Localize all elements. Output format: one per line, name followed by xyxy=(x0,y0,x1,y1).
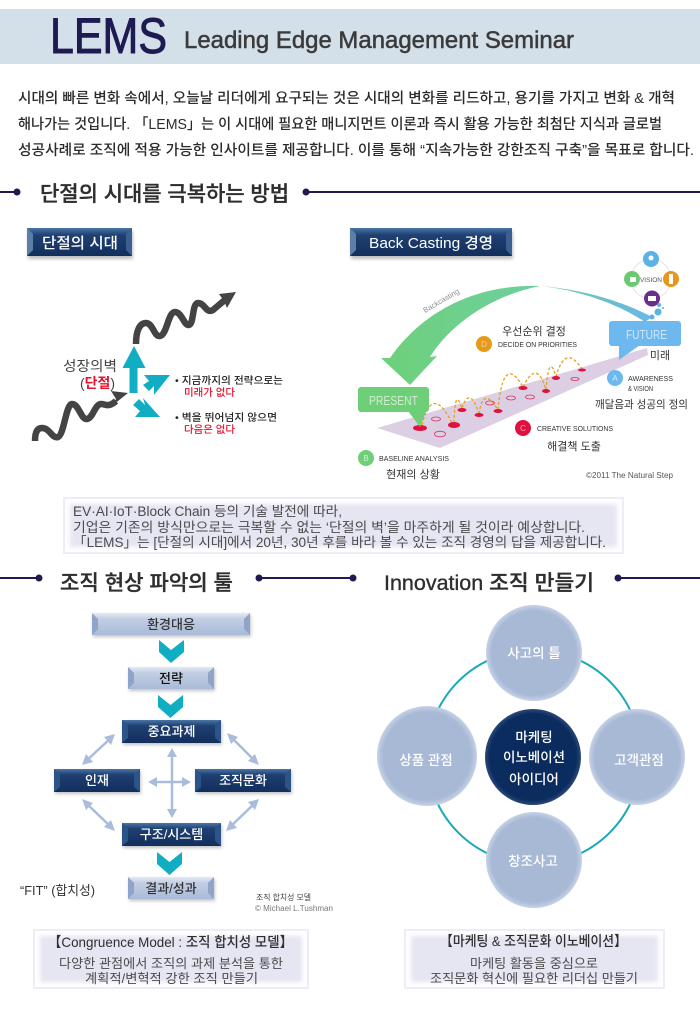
subtitle: Leading Edge Management Seminar xyxy=(184,27,574,54)
circle: 고객관점 xyxy=(589,709,685,805)
right-up arrow xyxy=(143,375,170,395)
road strip xyxy=(377,348,648,448)
step A xyxy=(595,370,688,411)
title: LEMS: LEMS xyxy=(50,8,167,64)
bullet 1 xyxy=(175,374,283,399)
step A: A xyxy=(612,374,618,383)
callout: discontinuity note xyxy=(64,498,623,553)
callout: congruence model xyxy=(34,930,308,988)
backcasting arc arrow xyxy=(381,286,652,385)
callout: PRESENT: PRESENT xyxy=(369,393,418,408)
button: 단절의 시대: 단절의 시대 xyxy=(42,235,118,252)
step A: AWARENESS xyxy=(628,376,673,383)
button: 단절의 시대 xyxy=(27,228,133,259)
callout: congruence model: 【Congruence Model : 조직 합치성 모델】 xyxy=(48,934,293,950)
box: 조직문화 xyxy=(195,769,292,794)
box: 환경대응 xyxy=(92,613,251,637)
bullet 2: • 벽을 뛰어넘지 않으면 xyxy=(175,412,277,424)
label: Backcasting: Backcasting xyxy=(422,287,461,315)
step A: & VISION xyxy=(628,386,653,393)
callout: marketing and culture: 조직문화 혁신에 필요한 리더십 만들기 xyxy=(430,971,638,986)
button: Back Casting 경영: Back Casting 경영 xyxy=(369,235,493,252)
double arrows xyxy=(82,733,259,831)
callout: congruence model: 계획적/변혁적 강한 조직 만들기 xyxy=(85,971,258,986)
circle: 상품 관점: 상품 관점 xyxy=(399,753,453,768)
callout: marketing and culture: 마케팅 활동을 중심으로 xyxy=(470,956,598,971)
header band xyxy=(0,8,700,64)
hollow stepping points xyxy=(432,378,579,437)
upper wave arrow xyxy=(136,292,236,344)
box: 조직문화: 조직문화 xyxy=(219,773,267,788)
copyright: ©2011 The Natural Step xyxy=(586,471,674,480)
bullet 1: 미래가 없다 xyxy=(184,386,235,399)
model credit xyxy=(255,892,333,913)
box: 환경대응: 환경대응 xyxy=(147,617,195,632)
heading: overcoming the age of discontinuity xyxy=(0,183,700,206)
step B xyxy=(358,450,449,481)
step B: BASELINE ANALYSIS xyxy=(379,456,449,463)
intro text block: 성공사례로 조직에 적용 가능한 인사이트를 제공합니다. 이를 통해 “지속가능한 강한조직 구축”을 목표로 합니다. xyxy=(18,142,694,159)
chevron 3 xyxy=(157,852,182,875)
bullet 1: • 지금까지의 전략으로는 xyxy=(175,374,283,387)
center circle: 이노베이션 xyxy=(503,750,565,765)
model credit: © Michael L.Tushman xyxy=(255,904,333,913)
heading: organization diagnosis tool: 조직 현상 파악의 툴 xyxy=(60,572,233,595)
callout: PRESENT xyxy=(358,387,429,427)
box: 인재 xyxy=(54,769,141,794)
lower wave arrow xyxy=(35,391,128,441)
step D: D xyxy=(481,340,487,349)
step C xyxy=(515,420,613,453)
heading: overcoming the age of discontinuity: 단절의 시대를 극복하는 방법 xyxy=(40,183,289,206)
circle: 고객관점: 고객관점 xyxy=(614,753,664,768)
hop path xyxy=(422,358,582,425)
callout: discontinuity note: 「LEMS」는 [단절의 시대]에서 20년, 30년 후를 바라 볼 수 있는 조직 경영의 답을 제공합니다. xyxy=(73,535,606,550)
vision cluster: VISION xyxy=(640,277,662,284)
heading: organization diagnosis tool xyxy=(0,572,356,595)
step C: C xyxy=(520,424,526,433)
circle: 창조사고 xyxy=(486,812,582,908)
up arrow xyxy=(122,346,146,393)
vision cluster xyxy=(624,251,679,320)
intro text block xyxy=(18,90,694,159)
box: 전략 xyxy=(128,667,215,691)
step C: 해결책 도출 xyxy=(547,439,601,453)
label: wall of growth: 성장의벽 xyxy=(63,358,117,374)
step A: 깨달음과 성공의 정의 xyxy=(595,398,688,411)
model credit: 조직 합치성 모델 xyxy=(256,892,311,902)
box: 구조/시스템 xyxy=(122,823,222,848)
box: 전략: 전략 xyxy=(159,671,183,686)
diagram: back casting xyxy=(358,251,688,481)
diagram: wall of growth xyxy=(35,292,283,441)
callout: FUTURE: FUTURE xyxy=(626,327,667,342)
callout: discontinuity note: 기업은 기존의 방식만으로는 극복할 수 없는 ‘단절의 벽’을 마주하게 될 것이라 예상합니다. xyxy=(73,520,585,535)
callout: discontinuity note: EV·AI·IoT·Block Chain 등의 기술 발전에 따라, xyxy=(73,504,342,519)
step D: 우선순위 결정 xyxy=(502,325,566,338)
label: 미래: 미래 xyxy=(650,349,670,362)
circle: 상품 관점 xyxy=(377,706,477,806)
chart: innovation circles xyxy=(377,605,685,908)
label: wall of growth: (단절) xyxy=(80,375,115,391)
step B: B xyxy=(363,454,369,463)
step C: CREATIVE SOLUTIONS xyxy=(537,426,613,433)
button: Back Casting 경영 xyxy=(350,228,513,259)
box: 구조/시스템: 구조/시스템 xyxy=(140,827,203,842)
center circle xyxy=(485,709,581,805)
circle: 창조사고: 창조사고 xyxy=(508,854,558,869)
callout: marketing and culture: 【마케팅 & 조직문화 이노베이션】 xyxy=(440,933,627,949)
label: wall of growth xyxy=(63,358,117,391)
label: FIT: “FIT” (합치성) xyxy=(20,883,95,898)
box: 중요과제: 중요과제 xyxy=(148,724,195,739)
step D xyxy=(476,325,577,352)
center circle: 아이디어 xyxy=(509,772,559,787)
intro text block: 시대의 빠른 변화 속에서, 오늘날 리더에게 요구되는 것은 시대의 변화를 리드하고, 용기를 가지고 변화 & 개혁 xyxy=(18,90,675,107)
red stepping points xyxy=(413,368,586,431)
chevron 1 xyxy=(159,640,184,663)
intro text block: 해나가는 것입니다. 「LEMS」는 이 시대에 필요한 매니지먼트 이론과 즉시 활용 가능한 최첨단 지식과 글로벌 xyxy=(18,116,662,133)
box: 중요과제 xyxy=(122,720,222,745)
callout: marketing and culture xyxy=(405,930,664,988)
right-down arrow xyxy=(133,398,160,417)
center circle: 마케팅 xyxy=(515,730,553,745)
callout: FUTURE xyxy=(609,321,681,360)
chart: congruence model xyxy=(20,613,333,913)
connecting ring xyxy=(427,650,641,864)
circle: 사고의 틀 xyxy=(486,605,582,701)
box: 결과/성과: 결과/성과 xyxy=(145,881,197,896)
step B: 현재의 상황 xyxy=(386,468,440,481)
callout: congruence model: 다양한 관점에서 조직의 과제 분석을 통한 xyxy=(59,956,283,971)
circle: 사고의 틀: 사고의 틀 xyxy=(507,646,561,661)
heading: innovation organization xyxy=(384,572,700,595)
bullet 2 xyxy=(175,412,277,436)
heading: innovation organization: Innovation 조직 만들기 xyxy=(384,572,594,595)
chevron 2 xyxy=(158,695,183,718)
bullet 2: 다음은 없다 xyxy=(184,423,235,436)
step D: DECIDE ON PRIORITIES xyxy=(498,342,577,349)
box: 인재: 인재 xyxy=(85,773,109,788)
box: 결과/성과 xyxy=(128,877,215,901)
